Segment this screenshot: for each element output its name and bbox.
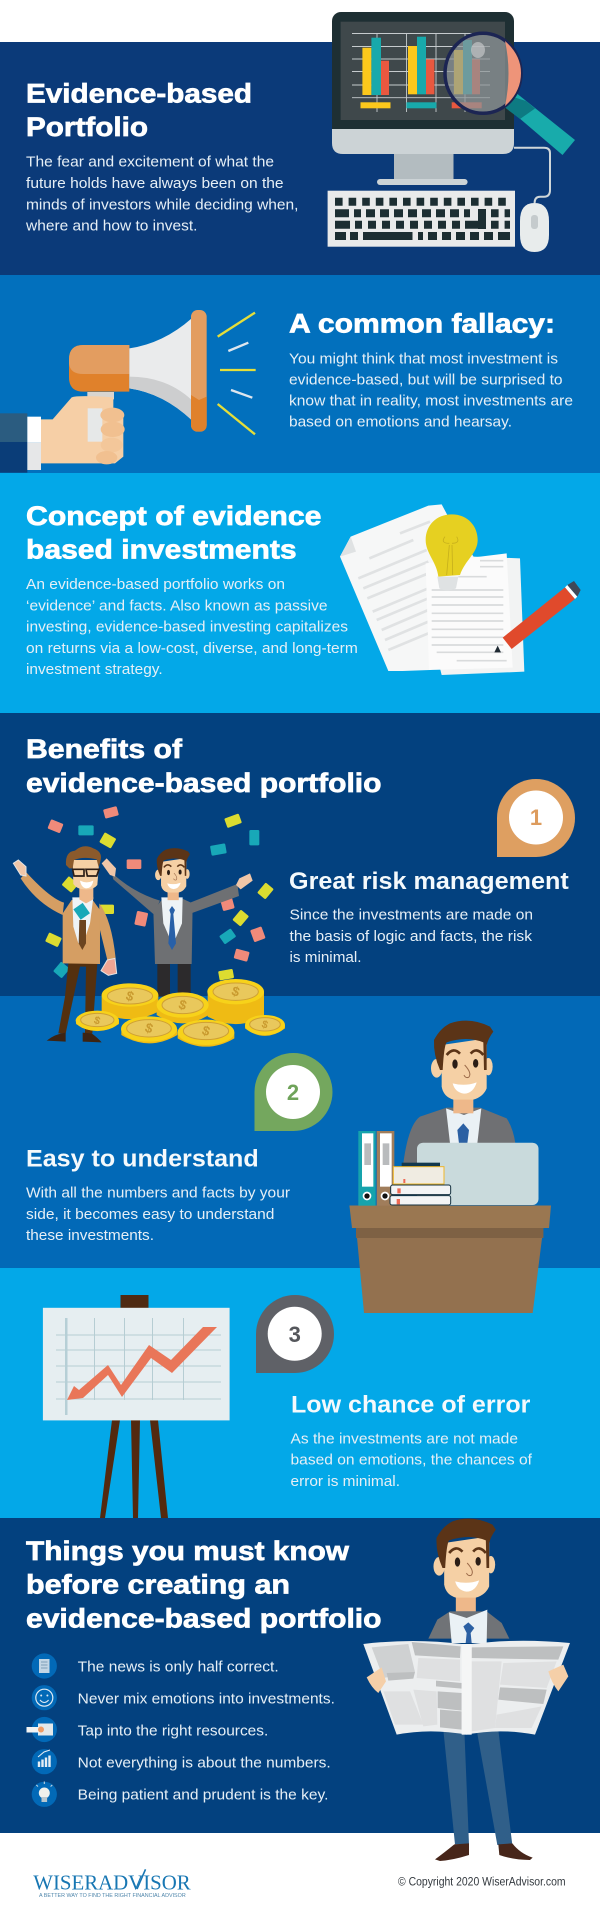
text: fallacy body: know that in reality, most investments are xyxy=(289,393,573,410)
text: intro body: future holds have always been on the xyxy=(26,175,284,192)
heading: Concept of evidence based investments: based investments xyxy=(26,535,297,565)
block: easy to understand xyxy=(26,1146,290,1244)
heading: Concept of evidence based investments xyxy=(26,501,322,565)
stack of gold coins: $ xyxy=(260,1018,270,1032)
chart axis xyxy=(65,1318,68,1415)
man torso and head xyxy=(428,1519,509,1643)
panel: benefit 2 background xyxy=(0,996,600,1268)
heading: things you must know: before creating an xyxy=(26,1569,290,1599)
copyright: © Copyright 2020 WiserAdvisor.com xyxy=(398,1877,566,1889)
block: great risk management xyxy=(289,868,569,966)
text: concept body xyxy=(26,576,358,678)
section: concept text xyxy=(26,501,358,678)
icon: hand holding megaphone xyxy=(0,310,256,473)
monitor stand xyxy=(394,154,454,180)
list item: news: The news is only half correct. xyxy=(78,1659,279,1676)
marker: number 1: 1 xyxy=(530,805,542,830)
businessman xyxy=(403,1021,516,1163)
block: low chance of error: As the investments are not made xyxy=(290,1430,518,1447)
hand and handle xyxy=(41,392,125,464)
desk xyxy=(349,1206,551,1313)
magnifier xyxy=(445,33,575,155)
panel: intro background xyxy=(0,42,600,275)
block: low chance of error: Low chance of error xyxy=(291,1392,530,1419)
panel: benefits background xyxy=(0,713,600,996)
heading: A common fallacy: A common fallacy: xyxy=(289,308,555,338)
light bulb xyxy=(426,514,478,590)
text: concept body: investing, evidence-based investing capitalizes xyxy=(26,619,348,636)
heading: Concept of evidence based investments: Concept of evidence xyxy=(26,501,322,531)
sound lines xyxy=(218,313,256,434)
panel: concept background xyxy=(0,473,600,713)
easel peg xyxy=(120,1295,148,1308)
block: easy to understand: side, it becomes easy to understand xyxy=(26,1206,274,1223)
sleeve xyxy=(0,413,27,473)
heading: things you must know xyxy=(26,1536,382,1633)
text: fallacy body xyxy=(289,350,573,431)
section: intro text xyxy=(25,79,299,235)
list item: emotions: Never mix emotions into investments. xyxy=(78,1691,335,1708)
block: great risk management: the basis of logic and facts, the risk xyxy=(290,928,532,945)
illustration: man reading newspaper xyxy=(363,1519,570,1861)
illustration: two businessmen with coins and confetti xyxy=(13,806,285,1047)
text: fallacy body: based on emotions and hearsay. xyxy=(289,414,512,431)
section: things to know xyxy=(26,1536,382,1807)
monitor screen xyxy=(341,22,505,120)
monitor chin xyxy=(332,129,514,154)
list item: resources: Tap into the right resources. xyxy=(78,1723,268,1740)
list item: patience xyxy=(32,1782,328,1807)
chart grid xyxy=(56,1318,221,1400)
marker: number 2: 2 xyxy=(287,1080,299,1105)
section: benefits heading: evidence-based portfolio xyxy=(26,768,382,798)
text: concept body: An evidence-based portfolio works on xyxy=(26,576,285,593)
text: intro body: The fear and excitement of what the xyxy=(26,154,274,171)
list item: numbers xyxy=(32,1749,331,1774)
section: benefits heading xyxy=(26,734,382,798)
block: easy to understand: these investments. xyxy=(26,1227,154,1244)
block: low chance of error xyxy=(290,1392,533,1490)
stack of gold coins: $ xyxy=(92,1014,102,1028)
heading: Evidence-based Portfolio: Evidence-based xyxy=(26,79,252,109)
megaphone grip xyxy=(69,345,129,392)
panel: things to know background xyxy=(0,1518,600,1833)
megaphone cone xyxy=(129,318,192,420)
laptop xyxy=(417,1143,538,1205)
megaphone rim xyxy=(191,310,207,432)
block: low chance of error: based on emotions, the chances of xyxy=(290,1452,533,1469)
stack of gold coins: $ xyxy=(230,983,242,1000)
rising arrow line xyxy=(67,1327,217,1400)
heading: things you must know: Things you must know xyxy=(26,1536,350,1566)
stack of gold coins: $ xyxy=(200,1023,212,1039)
man in tan suit xyxy=(13,846,117,1042)
list item: patience: Being patient and prudent is the key. xyxy=(78,1787,328,1804)
heading: Evidence-based Portfolio xyxy=(26,79,252,142)
block: great risk management: Great risk management xyxy=(289,868,569,895)
keyboard xyxy=(328,191,515,247)
block: great risk management: Since the investments are made on xyxy=(290,907,533,924)
marker: number 2 xyxy=(254,1053,332,1131)
marker: number 3 xyxy=(256,1295,334,1373)
books xyxy=(390,1163,451,1205)
man in grey suit xyxy=(102,848,253,997)
section: benefits heading: Benefits of xyxy=(26,734,183,764)
binders xyxy=(358,1131,394,1206)
mouse xyxy=(520,203,549,252)
stack of gold coins: $ xyxy=(124,988,136,1005)
list item: news xyxy=(32,1653,279,1679)
illustration: presentation board with chart xyxy=(43,1295,230,1518)
board xyxy=(43,1308,230,1420)
icon: computer with chart and magnifier xyxy=(328,12,575,252)
icon: documents, light bulb and pencil xyxy=(340,504,581,675)
easel legs xyxy=(100,1420,168,1518)
section: common fallacy text xyxy=(289,308,573,431)
text: intro body: where and how to invest. xyxy=(25,218,197,235)
stack of gold coins: $ xyxy=(143,1020,155,1037)
stack of gold coins: $ xyxy=(177,997,189,1013)
text: intro body xyxy=(25,154,299,235)
text: fallacy body: You might think that most investment is xyxy=(289,350,558,367)
monitor base xyxy=(377,179,468,185)
heading: Evidence-based Portfolio: Portfolio xyxy=(26,112,148,142)
logo: WiserAdvisor: A BETTER WAY TO FIND THE RIGHT FINANCIAL ADVISOR xyxy=(39,1893,186,1899)
text: fallacy body: evidence-based, but will be surprised to xyxy=(289,371,563,388)
text: concept body: investment strategy. xyxy=(26,661,163,678)
marker: number 1 xyxy=(497,779,575,857)
left document sheets xyxy=(340,504,517,671)
text: concept body: ‘evidence’ and facts. Also known as passive xyxy=(26,597,328,614)
illustration: businessman at desk xyxy=(349,1021,551,1313)
panel: benefit 3 background xyxy=(0,1268,600,1518)
list item: resources xyxy=(26,1717,268,1742)
marker: number 3: 3 xyxy=(289,1322,301,1347)
bar chart on screen xyxy=(352,33,490,112)
text: concept body: on returns via a low-cost, diverse, and long-term xyxy=(26,640,358,657)
shirt cuff xyxy=(27,417,41,470)
right document sheets xyxy=(426,553,524,675)
panel: common fallacy background xyxy=(0,275,600,473)
block: easy to understand: Easy to understand xyxy=(26,1146,259,1172)
block: easy to understand: With all the numbers and facts by your xyxy=(26,1185,290,1202)
logo: WiserAdvisor: WISERADVISOR xyxy=(33,1870,191,1894)
confetti xyxy=(45,806,274,981)
block: great risk management: is minimal. xyxy=(290,949,362,966)
list item: numbers: Not everything is about the numbers. xyxy=(78,1755,331,1772)
newspaper xyxy=(363,1641,570,1735)
mouse cable xyxy=(514,148,550,203)
pencil xyxy=(494,581,581,652)
monitor body xyxy=(332,12,514,137)
list item: emotions xyxy=(32,1685,335,1710)
trousers xyxy=(443,1730,512,1845)
text: intro body: minds of investors while deciding when, xyxy=(26,196,298,213)
stack of gold coins xyxy=(76,979,285,1047)
block: low chance of error: error is minimal. xyxy=(290,1473,400,1490)
heading: things you must know: evidence-based portfolio xyxy=(26,1603,382,1633)
shoes xyxy=(435,1843,533,1861)
